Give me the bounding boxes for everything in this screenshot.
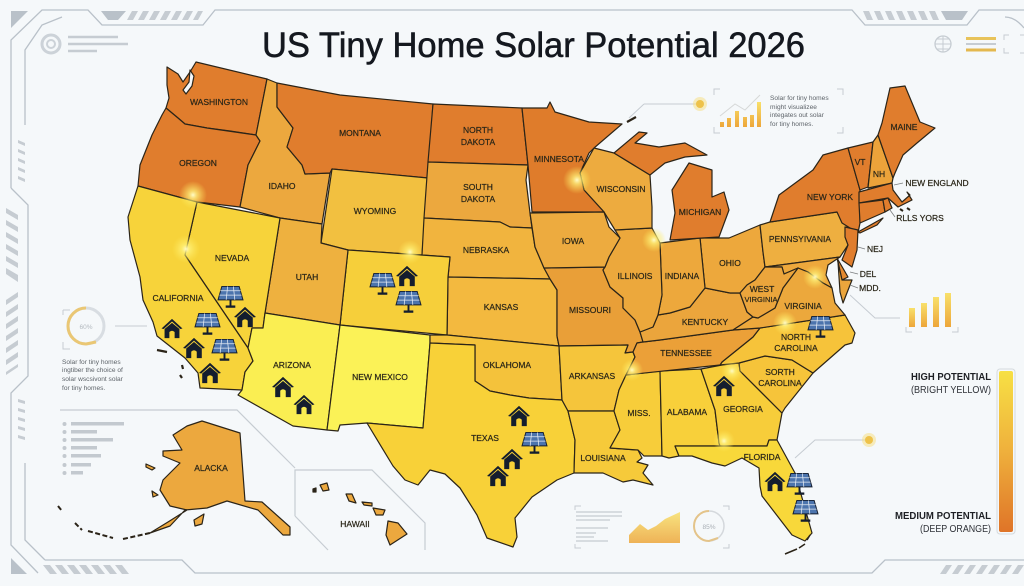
- state: North Carolina: [720, 315, 855, 373]
- icons: solar panels: [195, 273, 833, 521]
- state: Oregon: OREGON: [179, 158, 217, 168]
- callout: right bar chart: [850, 293, 958, 332]
- state: California: [128, 186, 253, 390]
- legend: potential scale: MEDIUM POTENTIAL: [895, 511, 991, 522]
- state: Alabama: [660, 369, 720, 458]
- state: West Virginia: VIRGINIA: [745, 295, 777, 304]
- callout: top-right growth chart: integates out solar: [770, 112, 825, 119]
- state: Indiana: INDIANA: [665, 271, 700, 281]
- legend: potential scale: [895, 369, 1015, 535]
- state: North Carolina: NORTH: [781, 332, 811, 342]
- state: Nevada: [185, 202, 280, 348]
- icon: top-left gear and status lines: [42, 35, 128, 53]
- state: New Mexico: [327, 325, 430, 431]
- state: Maine: [878, 86, 935, 178]
- state: Oklahoma: OKLAHOMA: [483, 360, 531, 370]
- list: bullet placeholder lines: [62, 422, 124, 475]
- state: West Virginia: [740, 267, 798, 318]
- callout: top-right growth chart: for tiny homes.: [770, 121, 813, 128]
- state: Utah: UTAH: [296, 272, 318, 282]
- callout: left donut: ingtiber the choice of: [62, 367, 123, 374]
- state: Idaho: [240, 79, 330, 224]
- state: Iowa: [530, 212, 620, 268]
- state: Ohio: [700, 225, 765, 293]
- state: Illinois: [603, 228, 662, 332]
- state: Arkansas: ARKANSAS: [569, 371, 615, 381]
- state: Georgia: GEORGIA: [723, 404, 763, 414]
- state: Rhode Island: [883, 198, 910, 212]
- callout: left donut: 60%: [79, 324, 93, 331]
- state: New York: NEW YORK: [807, 192, 853, 202]
- state: Colorado: [340, 250, 450, 335]
- external state labels: MDD.: [859, 283, 881, 293]
- external state labels: RLLS YORS: [896, 213, 944, 223]
- state: Wyoming: WYOMING: [354, 206, 396, 216]
- panel: Alaska inset: [58, 410, 295, 539]
- state: North Carolina: CAROLINA: [774, 343, 818, 353]
- state: Kansas: [447, 277, 559, 346]
- state: Wisconsin: [580, 148, 652, 230]
- state: New Hampshire: [868, 135, 893, 188]
- panel: Hawaii inset: [295, 470, 425, 550]
- state: Illinois: ILLINOIS: [618, 271, 653, 281]
- state: Florida: [675, 440, 812, 554]
- state: Oklahoma: [430, 335, 562, 400]
- state: Arizona: ARIZONA: [273, 360, 311, 370]
- state: Maryland: [765, 257, 840, 288]
- state: Vermont: [848, 142, 873, 190]
- state: New Hampshire: NH: [873, 169, 885, 179]
- state: Tennessee: TENNESSEE: [660, 348, 712, 358]
- callout: top-right growth chart: might visualizee: [770, 104, 817, 111]
- solar glow highlights: [172, 166, 827, 452]
- legend: potential scale: HIGH POTENTIAL: [911, 372, 991, 383]
- title: US Tiny Home Solar Potential 2026: [262, 26, 805, 65]
- icons: tiny homes: [162, 266, 786, 491]
- panel: contiguous US map: [128, 62, 935, 554]
- state: Ohio: OHIO: [719, 258, 741, 268]
- state: Kentucky: KENTUCKY: [682, 317, 728, 327]
- state: Arizona: [238, 313, 340, 430]
- state: Wisconsin: WISCONSIN: [596, 184, 646, 194]
- state: Texas: [367, 343, 575, 547]
- callout: top-right growth chart: Solar for tiny homes: [770, 95, 829, 102]
- state: Pennsylvania: PENNSYIVANIA: [769, 234, 831, 244]
- state: Minnesota: MINNESOTA: [534, 154, 584, 164]
- state: South Dakota: DAKOTA: [461, 194, 495, 204]
- state: Montana: MONTANA: [339, 128, 381, 138]
- state: Louisiana: LOUISIANA: [580, 453, 626, 463]
- state: Nevada: NEVADA: [215, 253, 249, 263]
- callout: left donut: for tiny homes.: [62, 385, 105, 392]
- state: Montana: [277, 83, 433, 178]
- state: California: CALIFORNIA: [152, 293, 204, 303]
- state: Wyoming: [321, 169, 428, 255]
- state: Washington: [166, 62, 267, 135]
- state: Virginia: VIRGINIA: [784, 301, 822, 311]
- icon: top-right globe and bars: [935, 35, 1024, 53]
- state: Nebraska: NEBRASKA: [463, 245, 509, 255]
- state: Alaska: [58, 421, 290, 539]
- state: Kansas: KANSAS: [484, 302, 519, 312]
- state: Hawaii: HAWAII: [340, 519, 370, 529]
- state: Florida: FLORIDA: [744, 452, 781, 462]
- state: Pennsylvania: [760, 212, 848, 267]
- legend: potential scale: (BRIGHT YELLOW): [911, 385, 991, 396]
- state: Michigan: [614, 132, 729, 240]
- state: Georgia: [701, 363, 782, 446]
- state: Kentucky: [640, 288, 753, 342]
- state: Missouri: MISSOURI: [569, 305, 611, 315]
- state: Alaska: ALACKA: [194, 463, 228, 473]
- state: Oregon: [138, 108, 260, 207]
- state: Iowa: IOWA: [562, 236, 585, 246]
- state: Vermont: VT: [855, 157, 865, 167]
- state: South Dakota: [424, 162, 532, 228]
- state: Idaho: IDAHO: [269, 181, 296, 191]
- callout: bottom chart panel: [575, 506, 729, 548]
- legend: potential scale: (DEEP ORANGE): [920, 524, 991, 535]
- state: Minnesota: [522, 102, 636, 212]
- state: South Carolina: [739, 356, 813, 413]
- callout: top-right growth chart: [629, 89, 843, 133]
- state: Delaware: [837, 258, 848, 280]
- external state labels: [850, 178, 969, 293]
- state: North Dakota: NORTH: [463, 125, 493, 135]
- state: Mississippi: MISS.: [627, 408, 651, 418]
- state: Virginia: [733, 268, 845, 330]
- callout: left donut: Solar for tiny homes: [62, 359, 121, 366]
- state: Maine: MAINE: [891, 122, 918, 132]
- callout: Florida pointer dot: [795, 433, 876, 458]
- state: North Dakota: DAKOTA: [461, 137, 495, 147]
- state: New Mexico: NEW MEXICO: [352, 372, 408, 382]
- external state labels: DEL: [860, 269, 877, 279]
- state: New York: [770, 148, 883, 233]
- state: Missouri: [544, 267, 643, 353]
- state: Mississippi: [610, 371, 662, 456]
- state: North Dakota: [428, 104, 528, 165]
- state: Delmarva peninsula: [838, 262, 852, 303]
- state: Louisiana: [568, 411, 653, 485]
- callout: bottom chart panel: 85%: [702, 524, 716, 531]
- state: South Carolina: SORTH: [765, 367, 795, 377]
- state: Texas: TEXAS: [471, 433, 499, 443]
- state: Indiana: [658, 238, 705, 315]
- state: Massachusetts: [859, 183, 912, 207]
- state: Arkansas: [559, 345, 635, 411]
- state: Washington: WASHINGTON: [190, 97, 248, 107]
- external state labels: NEJ: [867, 244, 883, 254]
- callout: left donut: solar wscsivont solar: [62, 376, 124, 383]
- state: Nebraska: [422, 218, 550, 279]
- state: South Carolina: CAROLINA: [758, 378, 802, 388]
- state: South Dakota: SOUTH: [463, 182, 493, 192]
- state: Michigan: MICHIGAN: [679, 207, 721, 217]
- callout: left donut: [62, 308, 147, 392]
- state: Connecticut: [859, 200, 885, 223]
- state: New Jersey: [842, 227, 858, 267]
- state: Alabama: ALABAMA: [667, 407, 707, 417]
- state: Utah: [265, 218, 348, 325]
- external state labels: NEW ENGLAND: [905, 178, 969, 188]
- state: Tennessee: [626, 328, 760, 375]
- state: West Virginia: WEST: [750, 284, 774, 294]
